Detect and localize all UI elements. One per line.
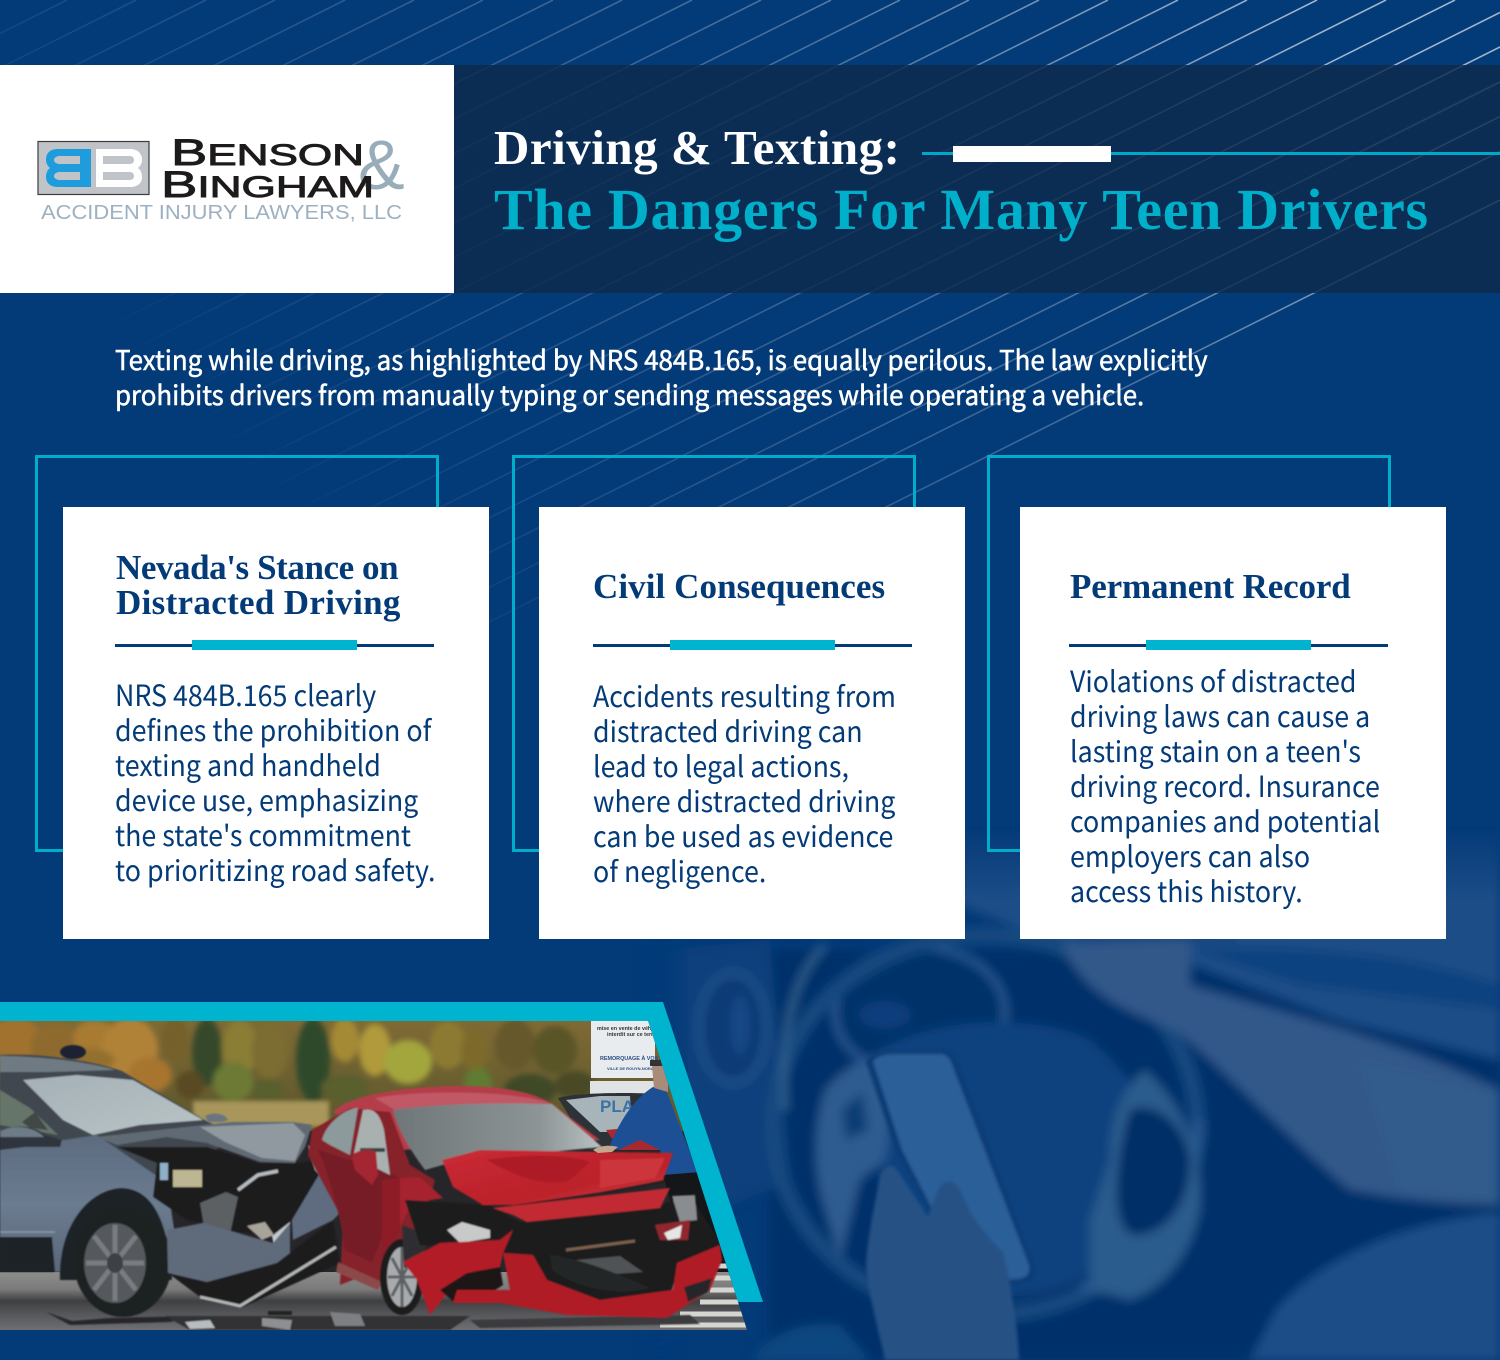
- red bumper main: [453, 1245, 722, 1318]
- card outline three: [987, 455, 1391, 852]
- suv engine bay: [117, 1147, 323, 1233]
- card heading: Distracted Driving: [116, 583, 401, 622]
- left edge darkening of the photo: [640, 920, 680, 1360]
- debris: [46, 1311, 700, 1330]
- card heading: [116, 548, 401, 622]
- right spoke: [1090, 1070, 1201, 1300]
- crash photo with cyan frame: [0, 1002, 763, 1330]
- card body: lasting stain on a teen's: [1070, 729, 1361, 771]
- card body: Violations of distracted: [1070, 659, 1357, 701]
- card heading: Nevada's Stance on: [116, 548, 398, 587]
- gauge cluster: [699, 973, 767, 1083]
- divider accent: [670, 640, 835, 650]
- red door sill: [336, 1262, 382, 1290]
- card body: of negligence.: [593, 849, 766, 891]
- car behind: [558, 1093, 660, 1150]
- card body: texting and handheld: [115, 743, 381, 785]
- signs: VILLE DE ROUYN-NORANDA: [607, 1066, 662, 1071]
- red bumper left: [403, 1230, 513, 1315]
- red fender: [382, 1177, 443, 1272]
- intro paragraph: prohibits drivers from manually typing or sending messages while operating a vehicle.: [115, 374, 1144, 413]
- card body: lead to legal actions,: [593, 744, 849, 786]
- suv hood: [97, 1122, 312, 1163]
- divider accent: [1146, 640, 1311, 650]
- road: [0, 1272, 750, 1330]
- panel: Nevada's stance: [63, 507, 489, 939]
- card body: driving laws can cause a: [1070, 694, 1370, 736]
- card body: to prioritizing road safety.: [115, 848, 435, 890]
- divider line: [1069, 644, 1388, 647]
- heading line two: The Dangers For Many Teen Drivers: [494, 177, 1429, 242]
- suv side window: [0, 1090, 58, 1135]
- card body: the state's commitment: [115, 813, 411, 855]
- logo name Bingham: B INGHAM: [161, 164, 374, 205]
- logo emblem BB: [38, 142, 149, 194]
- suv wheel: [76, 1235, 170, 1318]
- card body: companies and potential: [1070, 799, 1380, 841]
- arm: [1062, 940, 1500, 1205]
- card body: access this history.: [1070, 869, 1303, 911]
- suv roof and cabin: [0, 1054, 219, 1175]
- logo: [37, 126, 405, 224]
- card body: [593, 674, 896, 891]
- suv body: [0, 1130, 175, 1278]
- panel: civil consequences: [539, 507, 965, 939]
- suv fender: [292, 1173, 343, 1240]
- signs: interdit sur ce terrain: [607, 1032, 661, 1038]
- red roof: [333, 1086, 600, 1150]
- card body: device use, emphasizing: [115, 778, 418, 820]
- car behind: PLAC: [600, 1097, 646, 1116]
- left spoke: [816, 1056, 900, 1260]
- card body: [115, 673, 435, 890]
- card body: employers can also: [1070, 834, 1310, 876]
- card heading: Permanent Record: [1070, 567, 1351, 606]
- header: title panel: [454, 65, 1500, 293]
- card body: [1070, 659, 1380, 911]
- signs: REMORQUAGE À VOS FRAIS: [600, 1055, 676, 1062]
- wheel hub: [873, 1022, 1160, 1296]
- signs: mise en vente de véhicules: [597, 1026, 667, 1032]
- heading line one: Driving & Texting:: [494, 120, 900, 175]
- card outline one: [35, 455, 439, 852]
- card outline two: [512, 455, 916, 852]
- divider line: [593, 644, 912, 647]
- crosswalk: [660, 1266, 750, 1325]
- card body: where distracted driving: [593, 779, 895, 821]
- suv mirror: [0, 1127, 62, 1150]
- cyan band: [0, 1002, 763, 1302]
- intro paragraph: [115, 339, 1208, 413]
- red wheel: [380, 1239, 424, 1315]
- red engine bay: [405, 1195, 722, 1305]
- heading accent bar: [953, 146, 1111, 162]
- trees: [0, 1021, 684, 1131]
- card body: driving record. Insurance: [1070, 764, 1380, 806]
- suv bumper: [167, 1223, 290, 1283]
- red side windows: [322, 1108, 358, 1155]
- panel: permanent record: [1020, 507, 1446, 939]
- red lip: [493, 1188, 670, 1222]
- signs: [590, 1021, 660, 1094]
- logo ampersand: &: [358, 126, 405, 204]
- red car: [308, 1086, 722, 1318]
- divider line: [115, 644, 434, 647]
- steering wheel rim: [773, 935, 1197, 1315]
- red mirror: [352, 1150, 378, 1185]
- card body: NRS 484B.165 clearly: [115, 673, 376, 715]
- man's hand on hood: [593, 1146, 618, 1153]
- red windshield: [393, 1104, 602, 1170]
- phone: [866, 1051, 1034, 1284]
- diagonal stripes: [0, 0, 1500, 832]
- header: logo panel: [0, 65, 454, 293]
- base darkening: [770, 950, 1500, 1360]
- grass: [193, 1101, 329, 1127]
- card body: can be used as evidence: [593, 814, 893, 856]
- card heading: Civil Consequences: [593, 567, 885, 606]
- card body: Accidents resulting from: [593, 674, 896, 716]
- bystander: [610, 1060, 735, 1305]
- photo backdrop: [0, 1120, 750, 1280]
- red hood: [442, 1150, 673, 1205]
- logo name Benson: B ENSON: [171, 132, 364, 173]
- suv person head: [60, 1045, 86, 1059]
- suv wheel arch: [60, 1188, 172, 1280]
- logo tagline: ACCIDENT INJURY LAWYERS, LLC: [41, 201, 402, 224]
- heading accent rule: [922, 152, 1500, 155]
- lower left knee: [750, 1324, 870, 1360]
- card body: defines the prohibition of: [115, 708, 431, 750]
- red door body: [308, 1108, 435, 1285]
- hand: [866, 1166, 1019, 1360]
- intro paragraph: Texting while driving, as highlighted by NRS 484B.165, is equally perilous. The law explicitly: [115, 339, 1208, 378]
- suv lower bumper: [168, 1220, 340, 1307]
- dashboard haze: [960, 830, 1500, 1060]
- driver with phone photo: [660, 830, 1500, 1360]
- lower right leg: [1250, 1212, 1500, 1360]
- grey SUV: [0, 1045, 343, 1317]
- suv windshield: [23, 1075, 203, 1135]
- card body: distracted driving can: [593, 709, 863, 751]
- divider accent: [192, 640, 357, 650]
